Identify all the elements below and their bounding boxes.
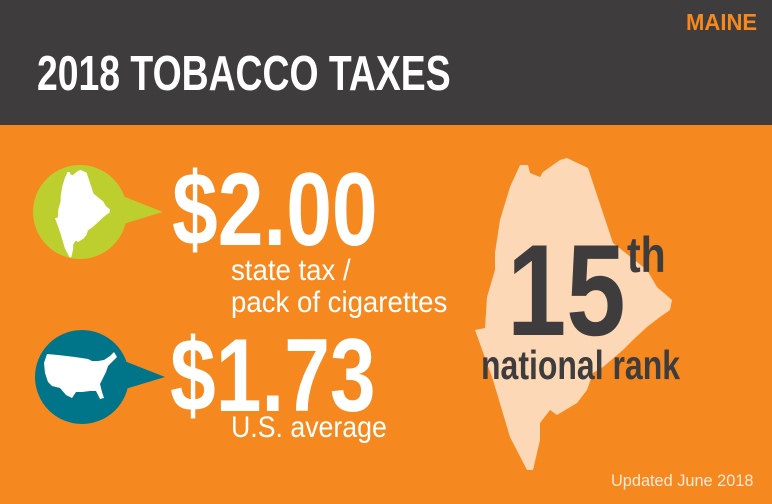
- rank caption: national rank: [481, 342, 680, 388]
- rank suffix: th: [627, 227, 666, 283]
- state tax caption: [231, 254, 447, 319]
- footer note: Updated June 2018: [611, 471, 753, 490]
- state tax caption: state tax /: [231, 254, 351, 287]
- rank number: 15: [507, 217, 626, 363]
- state tax caption: pack of cigarettes: [231, 286, 447, 319]
- US average value: $1.73: [170, 318, 376, 434]
- icon: US speech bubble: [35, 330, 165, 424]
- state tax value: $2.00: [172, 152, 378, 268]
- header band: [0, 0, 772, 125]
- title: 2018 TOBACCO TAXES: [37, 47, 451, 101]
- state label: MAINE: [686, 9, 757, 35]
- icon: Maine speech bubble: [33, 165, 163, 259]
- US average caption: U.S. average: [231, 411, 387, 444]
